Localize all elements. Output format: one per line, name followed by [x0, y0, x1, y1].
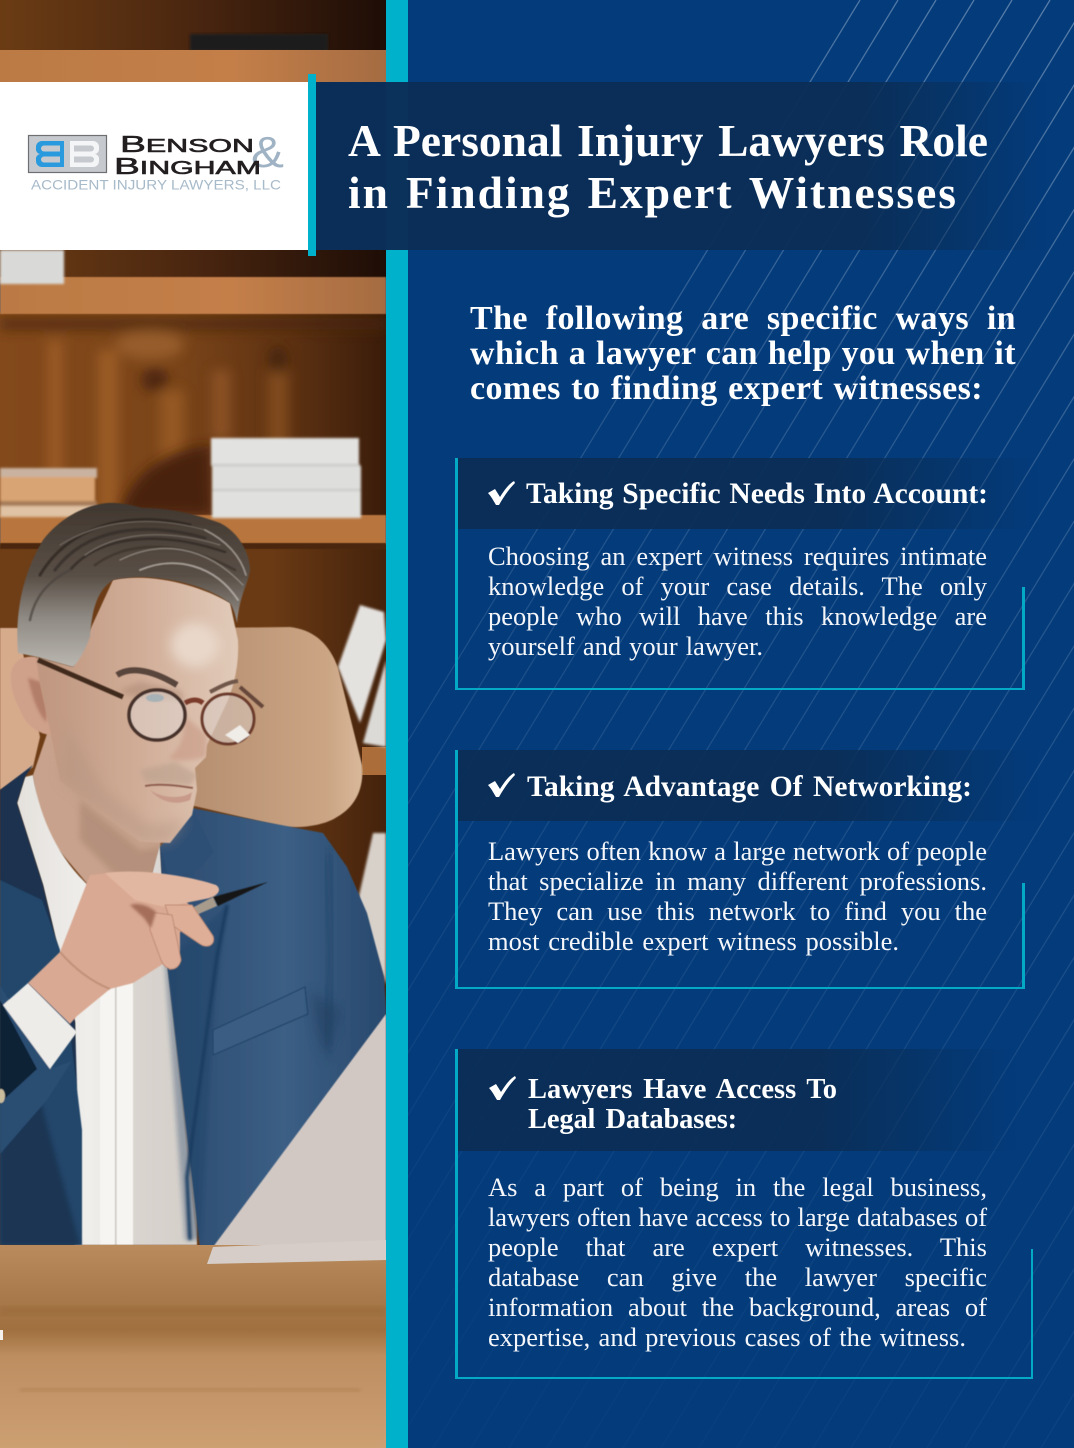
icon: check mark — [488, 773, 515, 797]
body text — [488, 836, 987, 956]
background diagonal pattern — [408, 0, 1074, 1448]
wooden desk — [0, 1240, 386, 1448]
wordmark: Bingham: B INGHAM — [114, 153, 261, 179]
ear — [11, 657, 58, 735]
body text: people who will have this knowledge are — [488, 601, 987, 631]
body text: They can use this network to find you the — [488, 896, 987, 926]
heading: Legal Databases: — [528, 1104, 737, 1134]
tagline: ACCIDENT INJURY LAWYERS, LLC — [31, 176, 281, 192]
bookshelf background — [0, 0, 386, 1248]
heading — [528, 1074, 837, 1134]
logo mark — [28, 136, 106, 172]
icon: check mark — [489, 1076, 516, 1100]
title: in Finding Expert Witnesses — [348, 166, 958, 218]
banner accent bar — [308, 74, 316, 256]
office chair — [0, 627, 362, 827]
body text: As a part of being in the legal business, — [488, 1172, 987, 1202]
banner background — [316, 82, 1048, 250]
ampersand: & — [251, 128, 284, 177]
logo panel — [0, 82, 308, 250]
body text: people that are expert witnesses. This — [488, 1232, 987, 1262]
heading band — [458, 458, 1040, 529]
panel: taking advantage of networking — [455, 750, 1025, 989]
document — [207, 1014, 386, 1264]
body text: knowledge of your case details. The only — [488, 571, 987, 601]
body text: yourself and your lawyer. — [488, 631, 763, 661]
heading band — [458, 750, 1040, 821]
body text: most credible expert witness possible. — [488, 926, 899, 956]
logo: Benson & Bingham — [28, 128, 284, 192]
intro text: The following are specific ways in — [470, 300, 1016, 337]
body text: lawyers often have access to large databases of — [488, 1202, 987, 1232]
stacked tan books — [0, 468, 100, 517]
panel: taking specific needs into account — [455, 458, 1025, 690]
body text: expertise, and previous cases of the witness. — [488, 1322, 966, 1352]
body text: database can give the lawyer specific — [488, 1262, 987, 1292]
body text: Lawyers often know a large network of people — [488, 836, 987, 866]
shirt — [17, 775, 197, 1245]
title banner — [308, 74, 1028, 256]
intro text: which a lawyer can help you when it — [470, 335, 1016, 372]
neck — [33, 725, 170, 887]
icon: check mark — [488, 481, 515, 505]
photo: lawyer at desk reading a document — [0, 0, 386, 1448]
intro text: comes to finding expert witnesses: — [470, 370, 983, 407]
heading: Lawyers Have Access To — [528, 1074, 837, 1104]
heading band — [458, 1049, 1018, 1151]
heading: Taking Advantage Of Networking: — [527, 770, 972, 802]
body text: that specialize in many different professions. — [488, 866, 987, 896]
title: A Personal Injury Lawyers Role — [348, 114, 988, 166]
glasses — [38, 660, 263, 744]
body text: information about the background, areas of — [488, 1292, 987, 1322]
title — [348, 114, 988, 218]
stacked white books — [0, 250, 361, 518]
panel: lawyers have access to legal databases — [455, 1049, 1033, 1379]
face — [36, 578, 238, 843]
left sleeve and cuff — [0, 983, 77, 1154]
hair — [17, 503, 250, 667]
teal vertical band — [386, 0, 408, 1448]
wordmark: Benson: B ENSON — [120, 131, 254, 157]
intro text — [470, 300, 1016, 407]
body text — [488, 1172, 988, 1352]
body text — [488, 541, 987, 661]
body text: Choosing an expert witness requires intimate — [488, 541, 987, 571]
suit jacket — [0, 765, 386, 1248]
heading: Taking Specific Needs Into Account: — [526, 478, 988, 510]
books behind chair — [338, 605, 386, 985]
hand holding pen — [28, 871, 268, 1024]
